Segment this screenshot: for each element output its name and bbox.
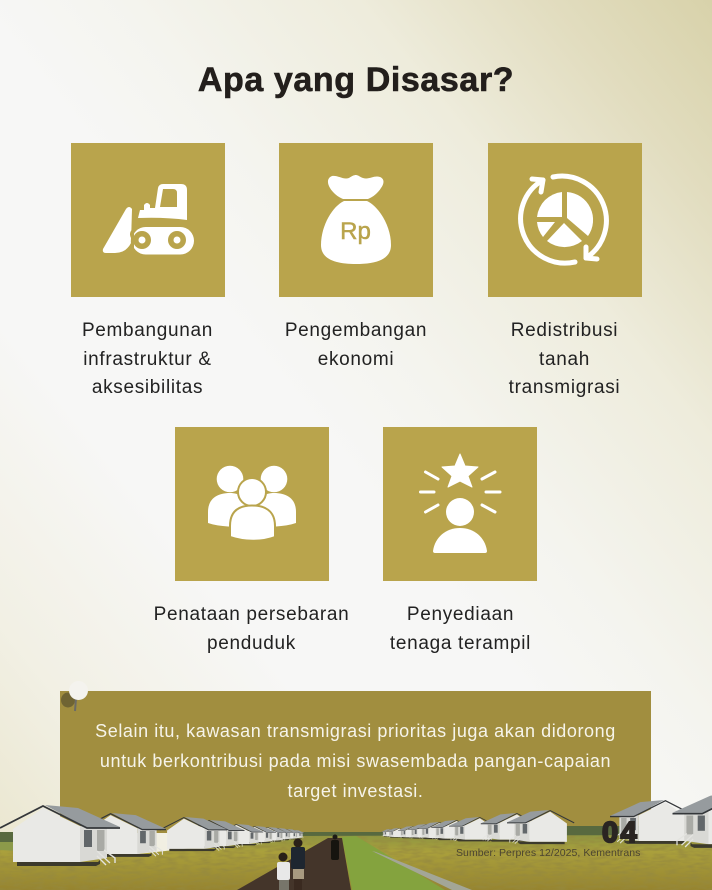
- title: Apa yang Disasar?: [198, 61, 514, 99]
- label: pembangunan infrastruktur: [82, 320, 213, 398]
- green strip and ditch: [342, 836, 445, 890]
- page number: 04: [602, 817, 639, 849]
- card: skilled worker icon: [383, 427, 536, 580]
- label: pembangunan infrastruktur: infrastruktur &: [83, 349, 212, 370]
- callout panel: [60, 691, 651, 833]
- callout panel: Selain itu, kawasan transmigrasi prioritas juga akan didorong: [95, 721, 616, 741]
- label: pengembangan ekonomi: Pengembangan: [285, 320, 427, 341]
- source note: Sumber: Perpres 12/2025, Kementrans: [456, 847, 640, 859]
- houses left row: [0, 805, 304, 866]
- label: redistribusi tanah: tanah: [539, 349, 590, 370]
- card: money bag icon: [279, 143, 432, 296]
- houses right row: [381, 793, 712, 848]
- label: redistribusi tanah: Redistribusi: [511, 320, 618, 341]
- field texture: [0, 830, 712, 890]
- label: penataan persebaran: Penataan persebaran: [154, 604, 349, 625]
- label: penyediaan tenaga terampil: [390, 604, 531, 654]
- card: people icon: [175, 427, 328, 580]
- label: penyediaan tenaga terampil: Penyediaan: [407, 604, 514, 625]
- photo: transmigration housing landscape: [0, 796, 712, 890]
- dirt path: [237, 838, 351, 890]
- label: redistribusi tanah: [508, 320, 620, 398]
- rice field: [0, 835, 712, 890]
- card: land redistribution icon: [488, 143, 642, 296]
- callout panel: target investasi.: [288, 781, 423, 801]
- icon: push pin: [61, 683, 88, 712]
- label: pengembangan ekonomi: ekonomi: [318, 349, 394, 370]
- people walking: [277, 834, 339, 890]
- callout panel: untuk berkontribusi pada misi swasembada pangan-capaian: [100, 751, 611, 771]
- label: penataan persebaran: [154, 604, 349, 654]
- left grass strip: [0, 842, 14, 851]
- label: penyediaan tenaga terampil: tenaga terampil: [390, 633, 531, 654]
- label: redistribusi tanah: transmigrasi: [509, 377, 620, 398]
- label: pengembangan ekonomi: [285, 320, 427, 370]
- label: pembangunan infrastruktur: Pembangunan: [82, 320, 213, 341]
- card: money bag icon: Rp: [340, 218, 371, 245]
- tree line: [0, 826, 712, 842]
- label: penataan persebaran: penduduk: [207, 633, 296, 654]
- label: pembangunan infrastruktur: aksesibilitas: [92, 377, 203, 398]
- card: bulldozer icon: [71, 143, 224, 296]
